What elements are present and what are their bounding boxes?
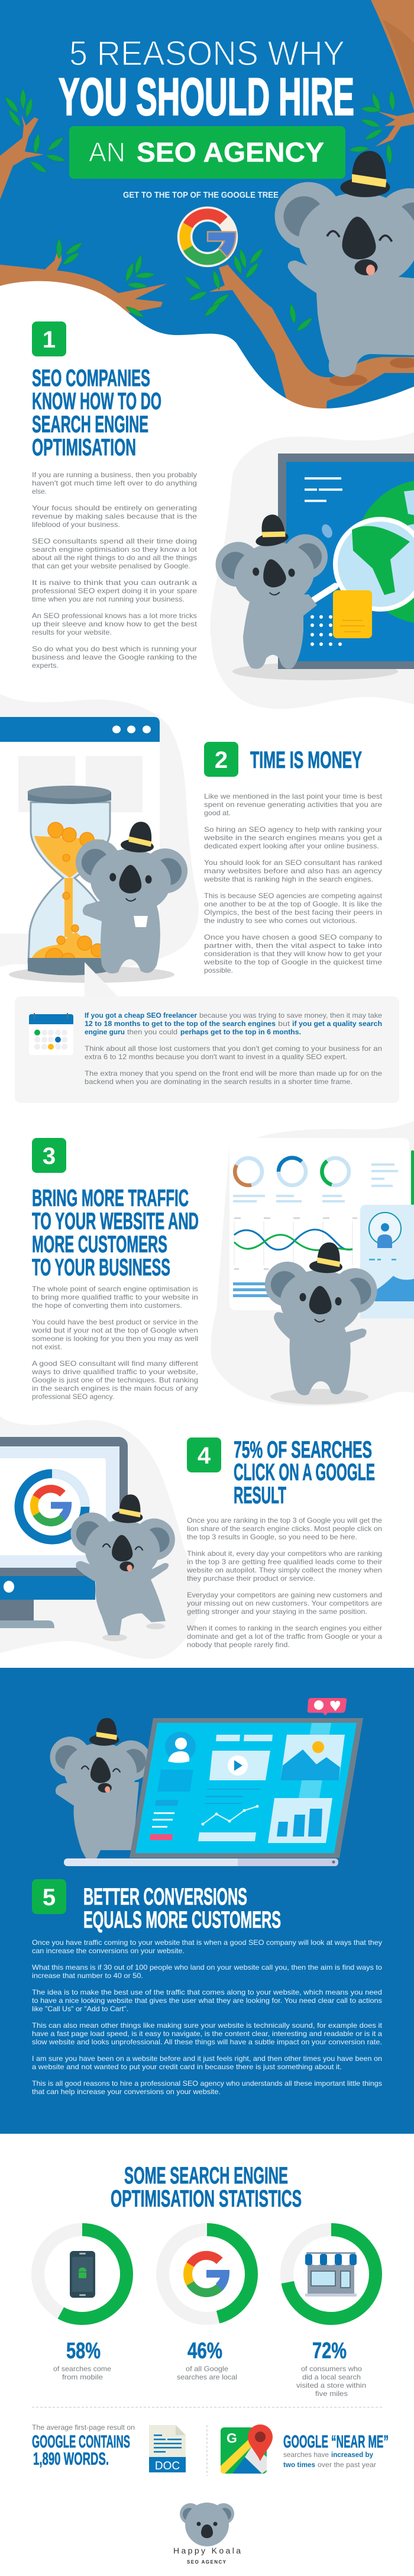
laptop (64, 1718, 363, 1866)
title banner: SEO AGENCY (137, 137, 324, 168)
text: reason 3 body: professional SEO agency. (32, 1392, 114, 1401)
stat: 46 percent local (163, 2230, 251, 2381)
text: reason 5 body (32, 1938, 383, 2096)
text: reason 2 body: website that is ranking high in the search engines. (203, 875, 373, 883)
text: reason 4 body: in the top 3 are getting free qualified leads come to their (187, 1558, 382, 1566)
background blob (210, 432, 414, 709)
stat: 46 percent local: searches are local (177, 2373, 237, 2381)
stat: 72 percent store: 72% (312, 2339, 347, 2363)
text: callout body: then you could (127, 1028, 177, 1036)
text: reason 3 body: in the search engines is the main focus of any (32, 1384, 198, 1392)
text: reason 2 body: dedicated expert looking after your online business. (204, 842, 379, 850)
text: callout body: but (278, 1020, 290, 1028)
monitor (278, 454, 414, 669)
icon: google g (187, 2255, 229, 2292)
koala beside laptop (50, 1718, 151, 1859)
icon: store (305, 2252, 357, 2297)
text: reason 4 body: Think about it, every day your competitors who are ranking (187, 1549, 382, 1558)
bar chart card (268, 1798, 332, 1843)
text: reason 2 body: consideration is that they will know how to get your (204, 950, 382, 958)
heading: statistics: OPTIMISATION STATISTICS (111, 2186, 302, 2212)
text: reason 2 body: website in the search engines means you get a (203, 834, 382, 842)
logo: happy koala: SEO AGENCY (187, 2559, 227, 2565)
text: reason 1 body: else. (32, 487, 47, 496)
badge 4 (187, 1437, 221, 1472)
text: reason 5 body: can increase the conversions on your website. (32, 1947, 185, 1955)
text: callout body: if you get a quality search (292, 1020, 382, 1028)
icon: google maps (221, 2424, 273, 2474)
background blob (0, 1416, 202, 1659)
text: reason 4 body: website on autopilot. They simply collect the money when (186, 1566, 382, 1574)
line graph (201, 1805, 259, 1826)
text: reason 1 body: experts. (32, 661, 59, 670)
text: reason 1 body: up their sleeve and know how to get the best (32, 620, 198, 628)
text: reason 2 body: So hiring an SEO agency to help with ranking your (204, 825, 382, 834)
text: reason 1 body: An SEO professional knows has a lot more tricks (32, 612, 197, 620)
badge 1 (32, 321, 66, 356)
text: reason 1 body: results for your website. (32, 628, 112, 636)
text: reason 5 body: Once you have traffic coming to your website that is when a good SEO company will look at ways that they (32, 1938, 382, 1947)
analytics dashboard (229, 1138, 414, 1318)
text: reason 1 body: time when you are not running your business. (32, 595, 185, 603)
heading 5: BETTER CONVERSIONS (83, 1884, 247, 1910)
text: reason 5 body: that can help increase your conversions on your website. (32, 2088, 221, 2096)
stat: word count: 1,890 WORDS. (33, 2449, 109, 2469)
heading 1: SEARCH ENGINE (32, 411, 148, 438)
donut gauges (235, 1158, 349, 1185)
panel: reason 2 illustration (0, 694, 199, 983)
text: reason 4 body: they purchase their product or service. (187, 1574, 315, 1583)
text: reason 2 body: This is because SEO agencies are competing against (204, 892, 383, 900)
panel: reason 1 illustration (208, 432, 414, 709)
donut chart (287, 2230, 376, 2318)
icon: phone (70, 2251, 95, 2298)
heading: statistics: SOME SEARCH ENGINE (124, 2163, 288, 2189)
text: callout body: extra 6 to 12 months because you don't want to invest in a quality SEO expert. (85, 1053, 347, 1061)
text: reason 1 body (32, 471, 198, 670)
stat: 58 percent mobile: from mobile (62, 2373, 103, 2381)
title banner: AN (89, 137, 125, 168)
heading 1: OPTIMISATION (32, 435, 136, 461)
koala waving (263, 1240, 379, 1395)
stat: word count: GOOGLE CONTAINS (32, 2432, 130, 2452)
donut chart (38, 2230, 127, 2318)
text: reason 5 body: like "Call Us" or "Add to Cart". (32, 2005, 128, 2013)
text: reason 1 body: haven't got much time left over to do anything (32, 479, 197, 487)
text: reason 5 body: What this means is if 30 out of 100 people who land on your website call you, then the aim is find ways to (32, 1963, 382, 1972)
callout: freelancer vs guru (15, 962, 399, 1103)
donut chart (163, 2230, 251, 2318)
text: reason 4 body (186, 1516, 382, 1649)
icon: document (149, 2425, 186, 2472)
text: reason 2 body: partner with, then the vital aspect to take into (204, 941, 382, 950)
panel: reason 5 (0, 1668, 414, 2134)
text: reason 3 body: The whole point of search engine optimisation is (32, 1285, 198, 1293)
text: reason 5 body: I am sure you have been on a website before and it just feels right, and then other times you have been on (32, 2054, 382, 2063)
badge 3: 3 (43, 1143, 56, 1169)
stat: near me: over the past year (318, 2461, 376, 2469)
social bubble (308, 1698, 347, 1716)
stat: 46 percent local: of all Google (186, 2365, 228, 2373)
icon: document: DOC (155, 2460, 180, 2472)
text: reason 1 body: Your focus should be entirely on generating (32, 504, 197, 512)
text: reason 5 body: slow website and looks unprofessional. All these things will have a subtle impact on your conversion rate. (32, 2038, 382, 2046)
text: reason 3 body: You could have the best product or service in the (32, 1318, 198, 1326)
text: reason 3 body: to bring more qualified traffic to your website in (32, 1293, 198, 1301)
line chart (234, 1217, 357, 1270)
heading 4 (234, 1437, 375, 1509)
text: reason 1 body: lifeblood of your business. (32, 520, 120, 529)
stat: 72 percent store: five miles (315, 2390, 348, 2398)
stat: 72 percent store (287, 2230, 376, 2398)
heading 3: TO YOUR WEBSITE AND (32, 1208, 199, 1234)
badge 1: 1 (43, 327, 56, 353)
text: reason 4 body: the top 3 results in Google, so you need to be here. (187, 1533, 357, 1541)
text: reason 1 body: business and leave the Google ranking to the (32, 653, 197, 661)
text: reason 2 body: You should look for an SEO consultant has ranked (204, 858, 382, 867)
browser window (0, 717, 160, 934)
tree branches (0, 0, 414, 414)
video card (209, 1751, 270, 1780)
text: reason 5 body: The idea is to make the best use of the traffic that comes along to your website, which means you need (32, 1988, 382, 1996)
text: reason 2 body: possible. (204, 966, 233, 975)
heading 1: SEO COMPANIES (32, 365, 150, 391)
text: reason 4 body: Everyday your competitors are gaining new customers and (187, 1591, 382, 1599)
text: callout body: engine guru (85, 1028, 125, 1036)
stat: 58 percent mobile: of searches come (53, 2365, 111, 2373)
icon: calendar (29, 1013, 73, 1055)
text: callout body: perhaps get to the top in 6 months. (180, 1028, 301, 1036)
text: callout body: Think about all those lost customers that you don't get coming to your business for an (85, 1044, 382, 1053)
background blob (0, 694, 199, 971)
text: reason 1 body: search engine optimisation so they know a lot (32, 545, 198, 554)
text: reason 2 body: Once you have chosen a good SEO company to (204, 933, 382, 941)
text: reason 5 body: have a fast page load speed, is it easy to navigate, is the content clear, interesting and readable or is it a (32, 2030, 382, 2038)
text: reason 5 body: increase that number to 40 or 50. (32, 1972, 143, 1980)
image card (280, 1735, 345, 1780)
panel: reason 3 illustration (211, 1121, 414, 1406)
badge 2: 2 (215, 747, 228, 773)
stat: word count: The average first-page result on (32, 2423, 135, 2432)
text: reason 3 body: Google is just one of the techniques. But ranking (32, 1376, 198, 1384)
white cut-out below the hero (0, 281, 414, 426)
badge 2 (204, 742, 238, 777)
text: reason 3 body: not exist. (32, 1343, 62, 1351)
heading 4: RESULT (234, 1482, 286, 1509)
text: reason 4 body: lion share of the search engine clicks. Most people click on (187, 1525, 382, 1533)
text: reason 3 body: world but if your not at the top of Google when (31, 1326, 198, 1334)
text: reason 2 body: spent on revenue generating activities that you are (204, 800, 382, 809)
heading 3 (32, 1185, 199, 1281)
koala mascot waving (274, 144, 414, 386)
heading 5: EQUALS MORE CUSTOMERS (83, 1907, 281, 1933)
text: reason 1 body: revenue by making sales because that is the (32, 512, 197, 520)
text: reason 4 body: dominate and get a lot of the traffic from Google or your a (187, 1632, 382, 1641)
heading 3: MORE CUSTOMERS (32, 1231, 167, 1258)
background blob (211, 1121, 414, 1406)
heading: statistics (111, 2163, 302, 2212)
heading 1: KNOW HOW TO DO (32, 388, 161, 414)
text: reason 4 body: Once you are ranking in the top 3 of Google you will get the (187, 1516, 382, 1525)
text: reason 4 body: When it comes to ranking in the search engines you either (187, 1624, 382, 1632)
hourglass with coins (27, 786, 111, 976)
text: reason 1 body: It is naive to think that you can outrank a (32, 578, 197, 587)
koala with coffee (72, 818, 191, 973)
koala dancing (69, 1493, 176, 1641)
stat: 58 percent mobile: 58% (66, 2339, 101, 2363)
text: callout body: backend when you are dominating in the search results in a shorter time frame. (85, 1078, 352, 1086)
text: reason 4 body: nobody that people rarely find. (187, 1641, 290, 1649)
text: reason 3 body: someone is looking for you then you may as well (32, 1334, 198, 1343)
text: reason 4 body: your missing out on new customers. Your competitors are (187, 1599, 382, 1607)
icon: google maps: G (227, 2430, 237, 2446)
title banner (69, 126, 345, 179)
panel: reason 4 illustration (0, 1416, 202, 1659)
text: reason 5 body: This is all good reasons to hire a professional SEO agency who understands all these important little things (32, 2079, 382, 2088)
stat: word count (32, 2423, 186, 2472)
text: reason 2 body: Like we mentioned in the last point your time is best (204, 792, 383, 800)
text: callout body (85, 1011, 382, 1086)
stat: near me: increased by (331, 2450, 373, 2459)
monitor with google ranking (0, 1437, 128, 1628)
stat: near me (221, 2424, 389, 2474)
logo: happy koala: Happy Koala (173, 2546, 241, 2555)
icon: google g on branch (185, 214, 236, 259)
heading 1 (32, 365, 161, 461)
badge 4: 4 (198, 1443, 211, 1469)
heading 3: BRING MORE TRAFFIC (32, 1185, 189, 1211)
text: reason 2 body: many websites before and also has an agency (204, 867, 382, 875)
text: reason 1 body: professional SEO expert doing it in your spare (32, 587, 197, 595)
title (59, 34, 354, 126)
text: reason 3 body (31, 1285, 199, 1401)
badge 3 (32, 1138, 66, 1173)
stat: 72 percent store: visited a store within (296, 2381, 366, 2390)
text: reason 3 body: the hope of converting them into customers. (32, 1301, 182, 1310)
laptop base (64, 1858, 338, 1866)
logo: happy koala (173, 2503, 241, 2565)
panel: hero (0, 0, 414, 426)
badge 5: 5 (43, 1884, 56, 1911)
heading 5 (83, 1884, 281, 1933)
stat: near me: two times (283, 2461, 315, 2469)
text: reason 1 body: So do what you do best which is running your (32, 645, 197, 653)
badge 5 (32, 1879, 66, 1914)
text: reason 5 body: to have a nice looking website that gives the user what they are looking for. You need clear call to actions (32, 1996, 382, 2005)
stat: 72 percent store: of consumers who (301, 2365, 362, 2373)
stat: near me: searches have (283, 2450, 329, 2459)
text: reason 1 body: about all the right things to do and all the things (32, 554, 197, 562)
title: 5 REASONS WHY (69, 34, 345, 73)
text: reason 2 body: good at. (204, 809, 231, 817)
text: reason 2 body: one another to be at the top of Google. It is like the (204, 900, 382, 908)
text: callout body: because you was trying to save money, then it may take (199, 1011, 382, 1020)
stat: 58 percent mobile (38, 2230, 127, 2381)
heading 3: TO YOUR BUSINESS (32, 1255, 170, 1281)
text: callout body: If you got a cheap SEO freelancer (85, 1011, 197, 1020)
text: reason 2 body (203, 792, 383, 975)
leaves (4, 89, 396, 333)
profile (165, 1732, 196, 1763)
subtitle: GET TO THE TOP OF THE GOOGLE TREE (123, 190, 279, 200)
text: callout body: The extra money that you spend on the front end will be more than made up for on the (85, 1069, 382, 1078)
side panel (360, 1205, 414, 1318)
text: reason 1 body: that can get your website penalised by Google. (32, 562, 190, 570)
text: callout body: 12 to 18 months to get to the top of the search engines (85, 1020, 276, 1028)
text: reason 3 body: ways to drive qualified traffic to your website, (31, 1368, 198, 1376)
koala with magnifier (208, 506, 335, 669)
text: reason 2 body: the industry to see who comes out victorious. (204, 916, 357, 925)
stat: 46 percent local: 46% (187, 2339, 222, 2363)
donut 75 percent (19, 1474, 85, 1540)
text: reason 5 body: a website and not wanted to put your credit card in because there is just something about it. (32, 2063, 342, 2071)
text: reason 2 body: website to the top of Google in the quickest time (203, 958, 382, 966)
text: reason 3 body: A good SEO consultant will find many different (32, 1359, 199, 1368)
text: reason 2 body: Olympics, the best of the best facing their peers in (204, 908, 382, 916)
text: reason 1 body: If you are running a business, then you probably (32, 471, 197, 479)
text: reason 5 body: This can also mean other things like making sure your website is technically sound, for example does it (32, 2021, 383, 2030)
logo koala head (180, 2503, 234, 2546)
text: reason 1 body: SEO consultants spend all their time doing (32, 537, 197, 545)
stat: 72 percent store: did a local search (302, 2373, 361, 2381)
magnifying glass over globe (314, 519, 414, 638)
text: reason 4 body: getting stronger and your staying in the same position. (187, 1607, 367, 1616)
